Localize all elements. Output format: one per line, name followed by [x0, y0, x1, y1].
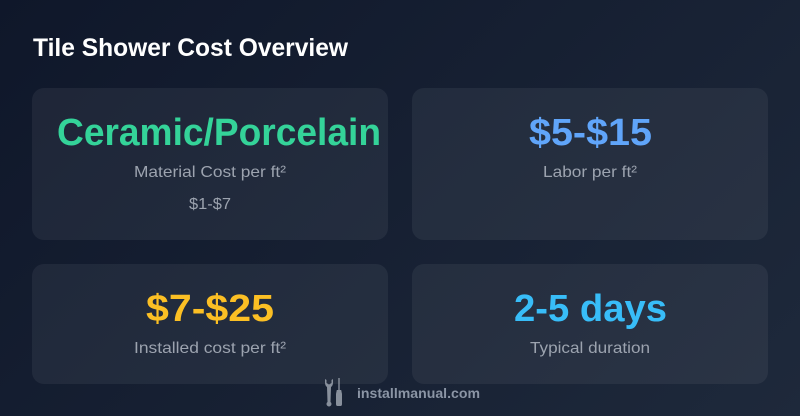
footer logo [325, 378, 480, 406]
labor label: Labor per ft² [543, 164, 638, 181]
installed value: $7-$25 [146, 288, 274, 330]
labor value: $5-$15 [529, 112, 652, 154]
material label: Material Cost per ft² [134, 164, 287, 181]
panel: labor cost [412, 88, 768, 240]
title: Tile Shower Cost Overview [33, 34, 349, 62]
duration value: 2-5 days [514, 288, 667, 330]
duration label: Typical duration [530, 340, 650, 357]
icon: wrench and screwdriver [325, 378, 342, 406]
panel: material cost [32, 88, 388, 240]
site name: installmanual.com [357, 385, 480, 401]
installed label: Installed cost per ft² [134, 340, 287, 357]
material price range: $1-$7 [189, 196, 231, 213]
material value: Ceramic/Porcelain [57, 112, 381, 154]
panel: installed cost [32, 264, 388, 384]
panel: duration [412, 264, 768, 384]
